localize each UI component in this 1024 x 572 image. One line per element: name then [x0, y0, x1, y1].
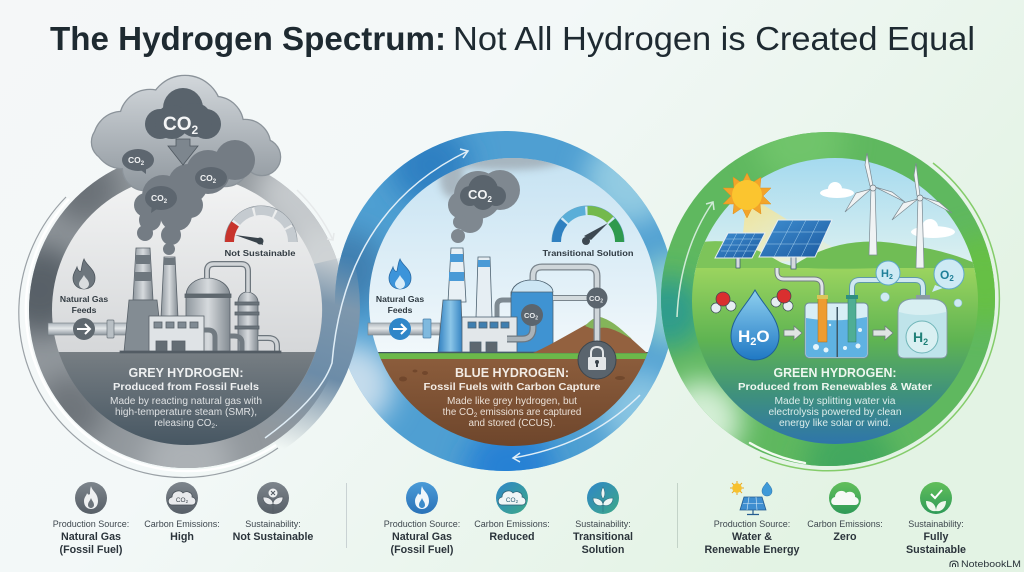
small CO2 clouds: CO: [200, 173, 213, 183]
grey description: releasing CO: [154, 418, 211, 429]
CO2 badges: [521, 288, 608, 326]
steel band swirl over grey ring: [255, 255, 360, 450]
gauge: transitional solution: Transitional Solution: [542, 248, 634, 258]
grey description: Produced from Fossil Fuels: [113, 381, 259, 393]
grey description: GREY HYDROGEN:: [128, 366, 244, 380]
icon: green cloud badge: [829, 482, 861, 514]
grey scene: [50, 170, 325, 447]
stat: carbon emissions blue: Carbon Emissions:: [474, 519, 550, 529]
panel: grey hydrogen: [18, 74, 338, 478]
hydrogen pipe and tank: 2: [923, 337, 928, 347]
water drop H2O: [731, 290, 779, 360]
panel: green hydrogen: [661, 132, 1000, 472]
small CO2 clouds: [122, 149, 227, 213]
green description: [738, 366, 932, 429]
stat: carbon emissions grey: [144, 519, 220, 543]
divider right: [677, 483, 678, 548]
icon: grey CO2 cloud badge: [166, 482, 198, 514]
stat: sustainability green: Sustainability:: [908, 519, 964, 529]
title: Not All Hydrogen is Created Equal: [453, 20, 975, 57]
blue description: the CO: [443, 407, 474, 418]
grey ring: [29, 168, 338, 468]
outer highlight arc: [19, 190, 334, 478]
small CO2 clouds: CO: [128, 155, 141, 165]
icon: grey CO2 cloud badge: 2: [186, 499, 189, 504]
blue scene: [365, 146, 661, 449]
icon: blue flame: [389, 259, 411, 289]
panel: blue hydrogen: [264, 131, 668, 471]
title: [50, 20, 975, 57]
icon: grey leaf cross badge: [257, 482, 289, 514]
stat: sustainability blue: Sustainability:: [575, 519, 631, 529]
water drop H2O: H: [738, 327, 750, 346]
stat: sustainability green: Fully: [924, 531, 949, 543]
stats: blue hydrogen: [384, 482, 633, 556]
H2 bubble: [876, 261, 900, 285]
blue description: and stored (CCUS).: [468, 418, 556, 429]
stat: production source grey: [53, 519, 129, 556]
label: natural gas feeds: Natural Gas: [60, 294, 108, 304]
stat: production source green: [704, 519, 800, 556]
mountain storage: [533, 317, 647, 353]
smoke cloud: [92, 76, 280, 255]
small CO2 clouds: 2: [213, 179, 217, 185]
grey factory: [120, 248, 281, 353]
blue smoke: [448, 170, 520, 243]
label: blue natural gas feeds: Feeds: [388, 305, 413, 315]
CO2 badges: CO: [589, 294, 600, 303]
blue pipe: [368, 318, 440, 340]
stat: sustainability blue: [573, 519, 633, 556]
label: natural gas feeds: Feeds: [72, 305, 97, 315]
stat: carbon emissions green: [807, 519, 883, 543]
wind turbines: [845, 153, 952, 268]
gas pipe: [48, 318, 128, 340]
electrolyzer: [777, 268, 868, 358]
stat: carbon emissions grey: High: [170, 531, 194, 543]
stat: production source grey: Production Source:: [53, 519, 129, 529]
green ring: [661, 132, 995, 466]
stat: sustainability green: [906, 519, 966, 556]
stat: production source green: Renewable Energy: [704, 544, 800, 556]
H2 bubble: 2: [889, 274, 893, 281]
stat: sustainability grey: [233, 519, 313, 543]
CO2 badges: 2: [600, 298, 603, 304]
big CO2 cloud: [145, 88, 221, 165]
process arrows: [784, 326, 893, 340]
green flow lines: [677, 163, 999, 471]
water molecules: [711, 289, 793, 313]
stat: carbon emissions green: Carbon Emissions:: [807, 519, 883, 529]
stat: sustainability green: Sustainable: [906, 544, 966, 556]
stat: production source blue: (Fossil Fuel): [391, 544, 454, 556]
icon: green check leaf badge: [920, 482, 952, 514]
blue description: 2: [474, 412, 478, 419]
hydrogen pipe and tank: H: [913, 329, 923, 345]
gauge: not sustainable: Not Sustainable: [224, 248, 296, 258]
label: natural gas feeds: [60, 294, 108, 315]
title: The Hydrogen Spectrum:: [50, 20, 446, 57]
green description: Made by splitting water via: [774, 396, 896, 407]
green description: Produced from Renewables & Water: [738, 381, 932, 393]
green scene: [690, 155, 985, 448]
grey description: [110, 366, 262, 430]
stat: production source grey: Natural Gas: [61, 531, 121, 543]
icon: blue flame badge: [406, 482, 438, 514]
stat: production source blue: Natural Gas: [392, 531, 452, 543]
O2 bubble: O: [940, 268, 949, 282]
blue description: Made like grey hydrogen, but: [447, 396, 577, 407]
stat: sustainability grey: Sustainability:: [245, 519, 301, 529]
CO2 badges: 2: [535, 316, 538, 322]
stat: sustainability grey: Not Sustainable: [233, 531, 313, 543]
blue ring: [335, 131, 668, 471]
icon: solar panel, sun and drop: [730, 481, 772, 514]
O2 bubble: [880, 259, 964, 307]
icon: grey flame badge: [75, 482, 107, 514]
blue smoke: 2: [488, 195, 492, 204]
label: blue natural gas feeds: [376, 294, 424, 315]
NotebookLM logo: NotebookLM: [961, 559, 1021, 570]
gauge: not sustainable: [224, 206, 297, 258]
icon: teal CO2 cloud badge: CO: [506, 497, 516, 504]
stat: sustainability blue: Solution: [582, 544, 624, 556]
blue smoke: CO: [468, 187, 488, 202]
green description: energy like solar or wind.: [779, 418, 891, 429]
grey description: high-temperature steam (SMR),: [115, 407, 257, 418]
stats: green hydrogen: [704, 481, 966, 556]
big CO2 cloud: 2: [192, 123, 198, 137]
stats: grey hydrogen: [53, 482, 313, 556]
icon: grey flame: [73, 259, 95, 289]
grey description: .: [215, 418, 218, 429]
blue description: BLUE HYDROGEN:: [455, 366, 569, 380]
stat: production source blue: [384, 519, 460, 556]
green description: GREEN HYDROGEN:: [774, 366, 896, 380]
water drop H2O: O: [756, 327, 770, 346]
stat: carbon emissions blue: Reduced: [489, 531, 535, 543]
blue description: Fossil Fuels with Carbon Capture: [424, 381, 601, 393]
label: blue natural gas feeds: Natural Gas: [376, 294, 424, 304]
H2 bubble: H: [881, 268, 889, 280]
small CO2 clouds: 2: [164, 199, 168, 205]
green description: electrolysis powered by clean: [768, 407, 902, 418]
blue flow arrows: [265, 149, 640, 462]
stat: production source grey: (Fossil Fuel): [60, 544, 123, 556]
grey description: 2: [211, 423, 215, 430]
blue description: [424, 366, 601, 429]
icon: sun: [723, 173, 771, 218]
stat: production source green: Production Source:: [714, 519, 790, 529]
CO2 badges: CO: [524, 311, 535, 320]
blue description: emissions are captured: [477, 407, 581, 418]
icon: grey CO2 cloud badge: CO: [176, 497, 186, 504]
water drop H2O: 2: [750, 336, 756, 348]
stat: carbon emissions blue: [474, 519, 550, 543]
icon: teal leaf badge: [587, 482, 619, 514]
O2 bubble: 2: [949, 274, 954, 283]
small CO2 clouds: CO: [151, 193, 164, 203]
icon: teal CO2 cloud badge: [496, 482, 528, 514]
big CO2 cloud: CO: [163, 114, 192, 135]
stat: carbon emissions grey: Carbon Emissions:: [144, 519, 220, 529]
stat: production source blue: Production Source:: [384, 519, 460, 529]
blue factory: [438, 248, 553, 352]
gauge: transitional solution: [542, 206, 634, 258]
divider left: [346, 483, 347, 548]
small CO2 clouds: 2: [141, 161, 145, 167]
icon: teal CO2 cloud badge: 2: [516, 499, 519, 504]
stat: carbon emissions green: Zero: [833, 531, 857, 543]
stat: sustainability blue: Transitional: [573, 531, 633, 543]
icon: padlock storage: [578, 341, 616, 379]
stat: production source green: Water &: [732, 531, 772, 543]
hydrogen pipe and tank: [852, 280, 947, 358]
solar panels: [715, 220, 832, 269]
capture pipes: [507, 267, 597, 345]
grey description: Made by reacting natural gas with: [110, 396, 262, 407]
